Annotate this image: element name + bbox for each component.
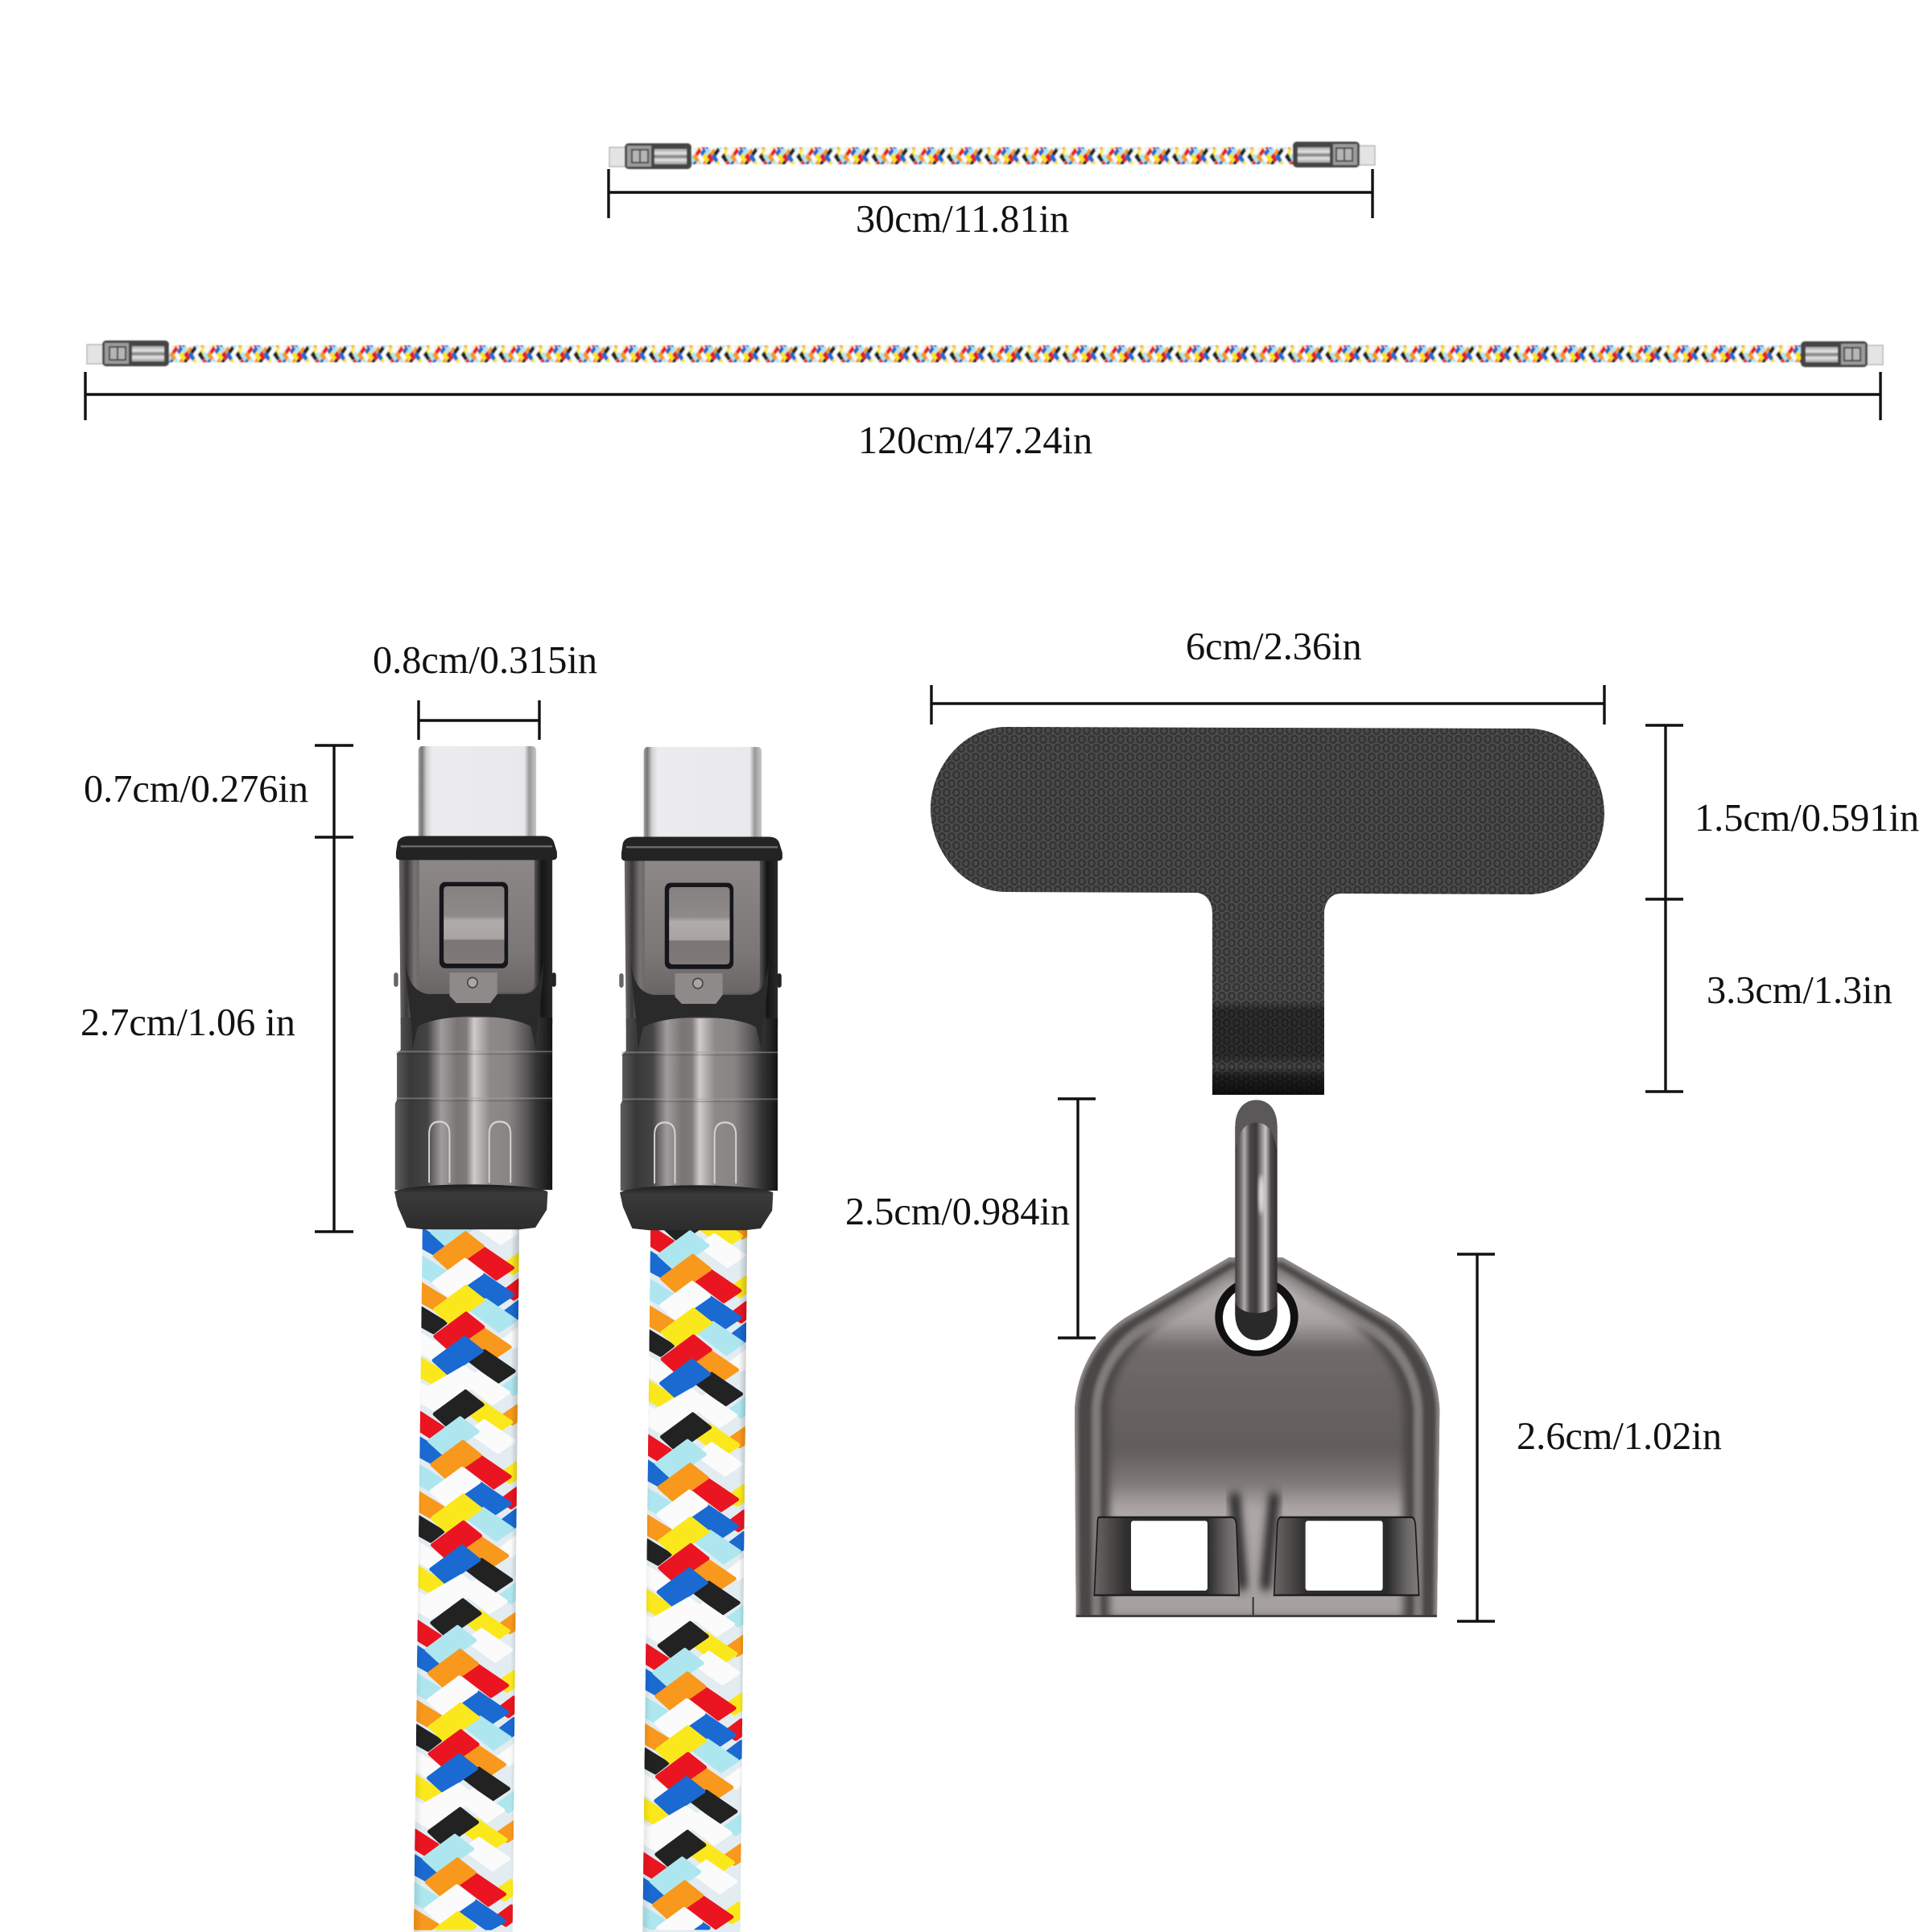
left braided cable with connector [394, 746, 557, 1932]
metal clip with ring [1075, 1100, 1439, 1619]
label: 1.5cm/0.591in: 1.5cm/0.591in [1695, 797, 1919, 840]
label: 120cm/47.24in: 120cm/47.24in [858, 419, 1092, 462]
braid [413, 1209, 519, 1932]
dimension line: clip height [1457, 1254, 1495, 1621]
braid [642, 1230, 747, 1932]
dimension line: connector width [419, 700, 539, 740]
dimension line: patch heights [1645, 725, 1683, 1092]
ring [1235, 1100, 1278, 1340]
label: 0.7cm/0.276in: 0.7cm/0.276in [84, 768, 308, 811]
label: 2.5cm/0.984in: 2.5cm/0.984in [845, 1191, 1070, 1233]
long cable 120cm [87, 341, 1883, 367]
label: 2.6cm/1.02in: 2.6cm/1.02in [1517, 1415, 1722, 1458]
metal connector [619, 747, 782, 1230]
dimension line: 6cm [931, 685, 1604, 724]
T-shaped patch [931, 727, 1604, 1095]
dimension line: 120cm [85, 372, 1880, 420]
label: 6cm/2.36in: 6cm/2.36in [1186, 625, 1362, 668]
right braided cable with connector [619, 747, 782, 1932]
right slot [1274, 1517, 1419, 1596]
label: 0.8cm/0.315in: 0.8cm/0.315in [373, 639, 597, 682]
label: 2.7cm/1.06 in: 2.7cm/1.06 in [80, 1001, 295, 1044]
metal connector [394, 746, 557, 1229]
label: 3.3cm/1.3in: 3.3cm/1.3in [1707, 969, 1893, 1012]
dimension line: 30cm [609, 169, 1373, 218]
label: 30cm/11.81in: 30cm/11.81in [856, 198, 1069, 241]
clip body [1075, 1257, 1439, 1619]
dimension line: connector heights [315, 745, 353, 1232]
dimension line: ring height [1058, 1099, 1096, 1338]
eyelet [1215, 1278, 1298, 1356]
left slot [1094, 1517, 1239, 1596]
short cable 30cm [609, 142, 1375, 169]
